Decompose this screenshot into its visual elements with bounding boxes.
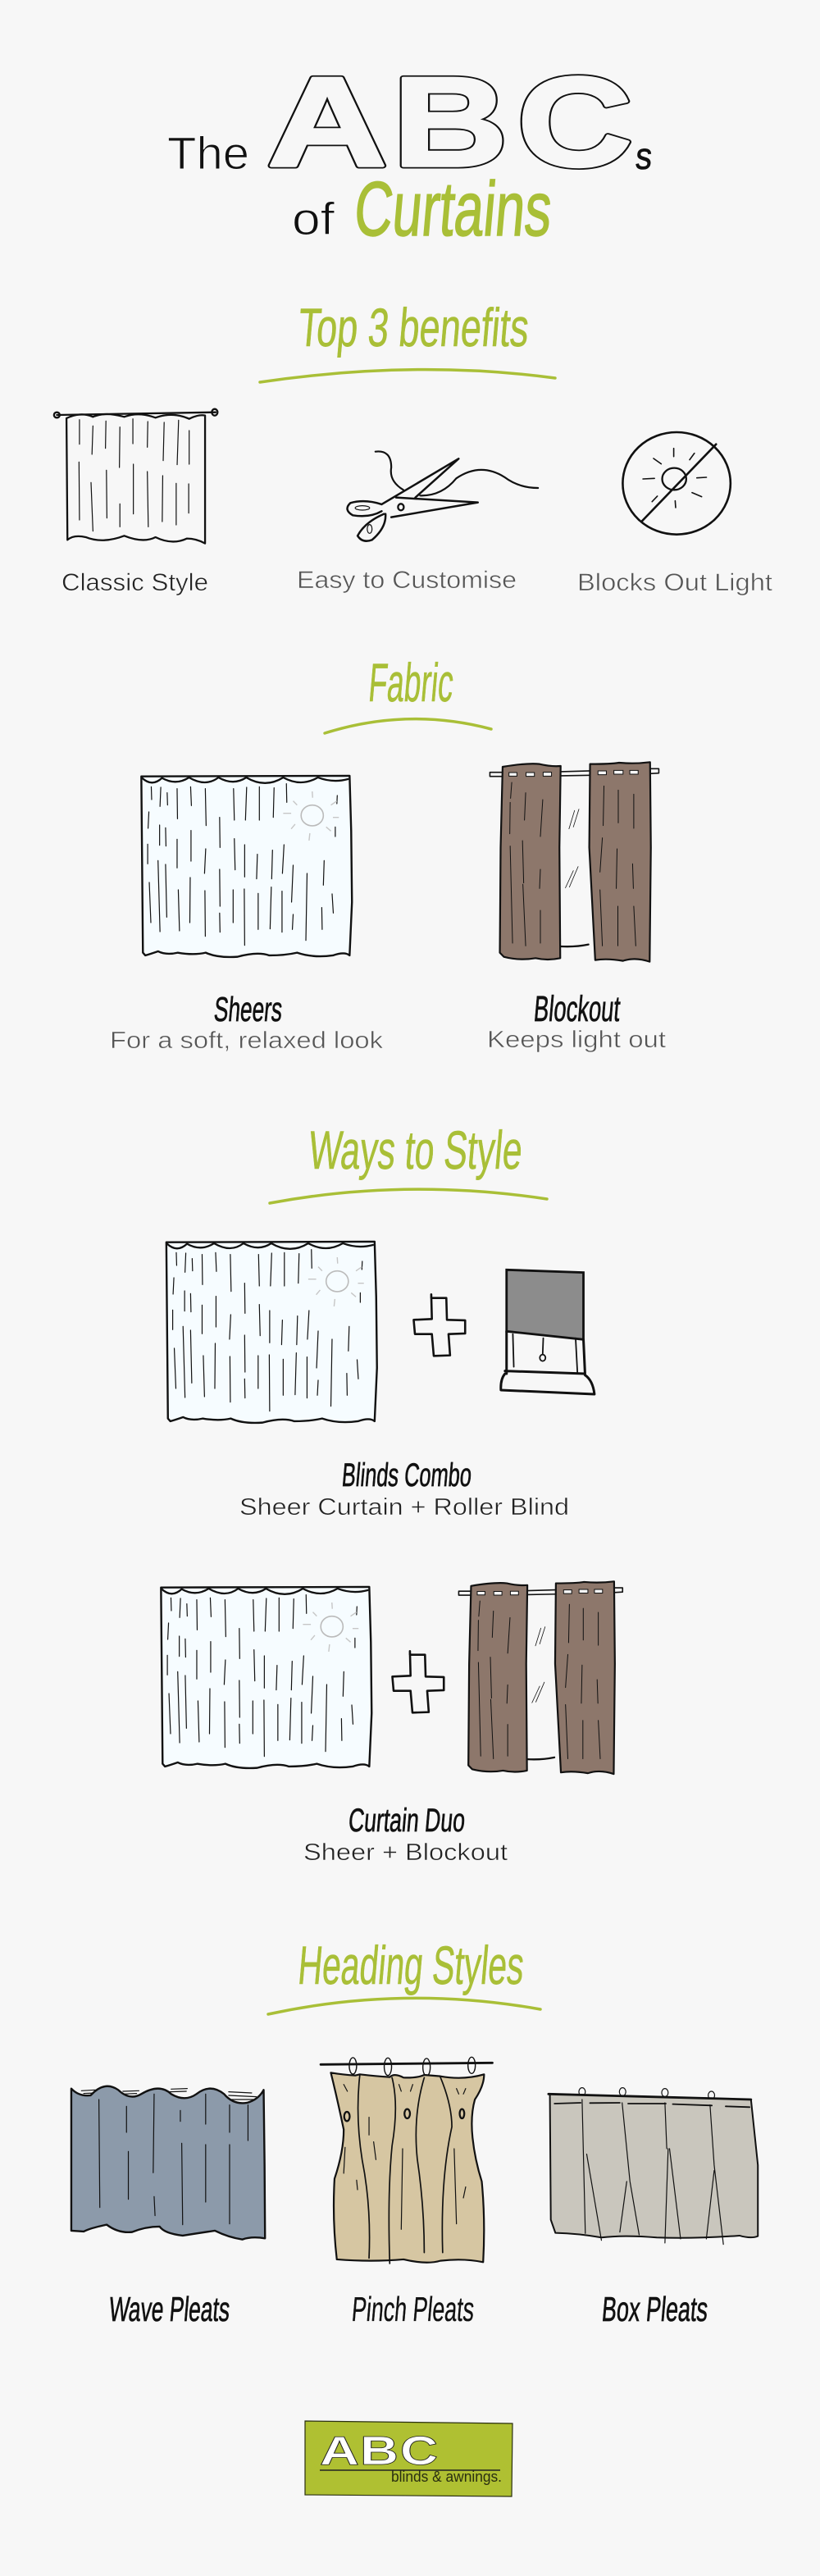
heading: Ways to Style: Ways to Style <box>307 1120 525 1181</box>
title letter: s: s <box>634 134 654 177</box>
description: blockout: Keeps light out <box>487 1027 666 1053</box>
title <box>167 51 654 252</box>
logo background <box>305 2421 512 2496</box>
icon: plus <box>392 1651 444 1712</box>
label: Wave Pleats: Wave Pleats <box>107 2290 231 2328</box>
logo letters: ABC: B <box>360 2429 399 2473</box>
section: fabric <box>110 653 666 1054</box>
heading: Fabric: Fabric <box>367 653 456 714</box>
label: Box Pleats: Box Pleats <box>600 2290 709 2328</box>
logo letters: ABC <box>320 2429 438 2473</box>
illustration: wave pleats <box>71 2086 265 2240</box>
icon: blocked sun <box>622 432 731 535</box>
illustration: sheer curtain <box>166 1242 377 1423</box>
icon: classic curtain <box>54 409 217 544</box>
heading: Heading Styles: Heading Styles <box>296 1935 526 1996</box>
illustration: box pleats <box>549 2088 758 2245</box>
section: heading styles <box>71 1935 758 2328</box>
illustration: pinch pleats <box>321 2057 492 2264</box>
label: Classic Style: Classic Style <box>61 569 208 596</box>
title word: of: of <box>292 193 335 244</box>
heading underline <box>260 370 555 382</box>
icon: scissors and thread <box>348 451 538 541</box>
label: Pinch Pleats: Pinch Pleats <box>350 2290 476 2328</box>
logo letters: ABC: A <box>320 2429 359 2473</box>
logo tagline: blinds & awnings. <box>391 2469 502 2485</box>
title letters: ABC outline: B <box>393 51 508 193</box>
heading underline <box>268 1998 540 2014</box>
heading: Top 3 benefits: Top 3 benefits <box>296 298 531 358</box>
title word: The: The <box>167 127 249 179</box>
heading underline <box>270 1189 547 1203</box>
logo rule <box>320 2469 500 2471</box>
label: Sheers: Sheers <box>212 990 284 1028</box>
label: Blinds Combo: Blinds Combo <box>340 1457 473 1493</box>
title word: Curtains: Curtains <box>351 166 555 252</box>
label: Blockout: Blockout <box>532 989 622 1029</box>
label: Curtain Duo: Curtain Duo <box>347 1803 467 1839</box>
title letters: ABC outline: C <box>517 51 632 193</box>
label: Blocks Out Light: Blocks Out Light <box>577 569 773 596</box>
description: curtain duo: Sheer + Blockout <box>303 1840 508 1866</box>
logo letters: ABC: C <box>400 2429 438 2473</box>
label: Easy to Customise: Easy to Customise <box>297 567 517 594</box>
logo <box>305 2421 512 2496</box>
section: top 3 benefits <box>54 298 773 596</box>
icon: plus <box>413 1294 465 1356</box>
title letters: ABC outline: B <box>393 51 508 193</box>
section: ways to style <box>161 1120 622 1866</box>
title letters: ABC outline: A <box>267 51 387 193</box>
illustration: blockout curtain <box>458 1581 622 1774</box>
title letters: ABC outline: A <box>267 51 387 193</box>
illustration: sheer curtain <box>141 776 352 957</box>
illustration: roller blind <box>501 1270 594 1394</box>
title letters: ABC outline <box>267 51 632 193</box>
description: blinds combo: Sheer Curtain + Roller Blind <box>239 1494 569 1521</box>
illustration: sheer curtain <box>161 1587 371 1768</box>
description: sheers: For a soft, relaxed look <box>110 1028 384 1054</box>
title letters: ABC outline: C <box>517 51 632 193</box>
heading underline <box>325 719 491 733</box>
illustration: blockout curtain <box>490 762 658 962</box>
